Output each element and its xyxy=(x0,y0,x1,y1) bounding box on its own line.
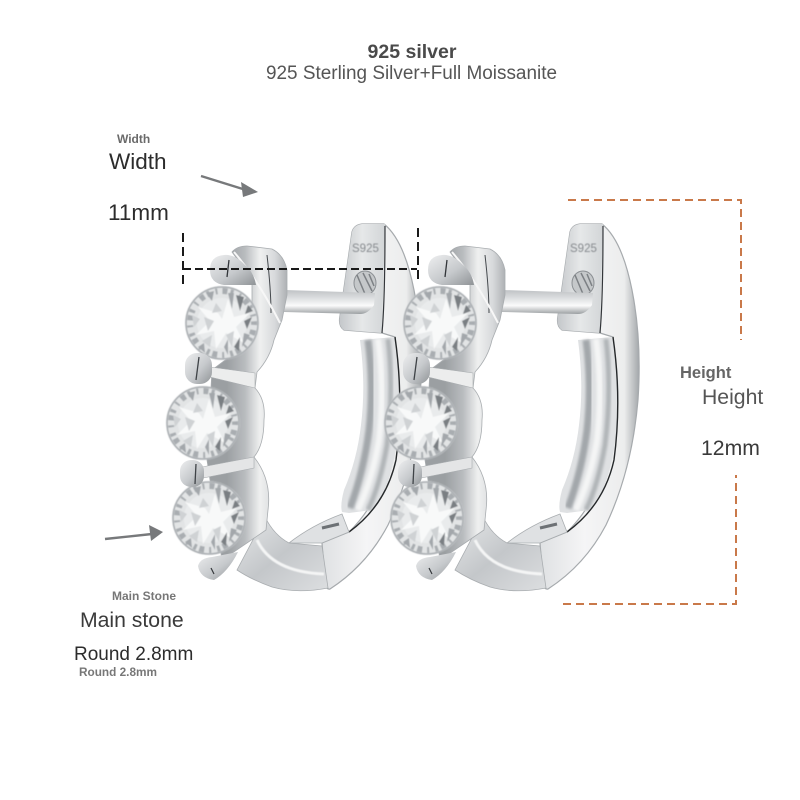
width small label: Width xyxy=(117,132,150,146)
subtitle: 925 Sterling Silver+Full Moissanite xyxy=(266,63,557,84)
main stone label: Main stone xyxy=(80,609,184,632)
right earring xyxy=(384,224,639,591)
title: 925 silver xyxy=(368,41,457,63)
height small label: Height xyxy=(680,364,732,382)
main stone small label: Main Stone xyxy=(112,589,176,603)
icon: main stone arrow xyxy=(105,525,163,541)
width label: Width xyxy=(109,149,167,174)
height value: 12mm xyxy=(701,437,760,460)
height dimension bracket xyxy=(563,200,741,604)
width dimension line xyxy=(183,228,418,285)
width value: 11mm xyxy=(108,200,169,225)
left earring xyxy=(166,224,421,591)
icon: width arrow xyxy=(201,176,258,197)
main stone value: Round 2.8mm xyxy=(74,644,193,665)
main stone small value: Round 2.8mm xyxy=(79,665,157,679)
height label: Height xyxy=(702,386,763,409)
